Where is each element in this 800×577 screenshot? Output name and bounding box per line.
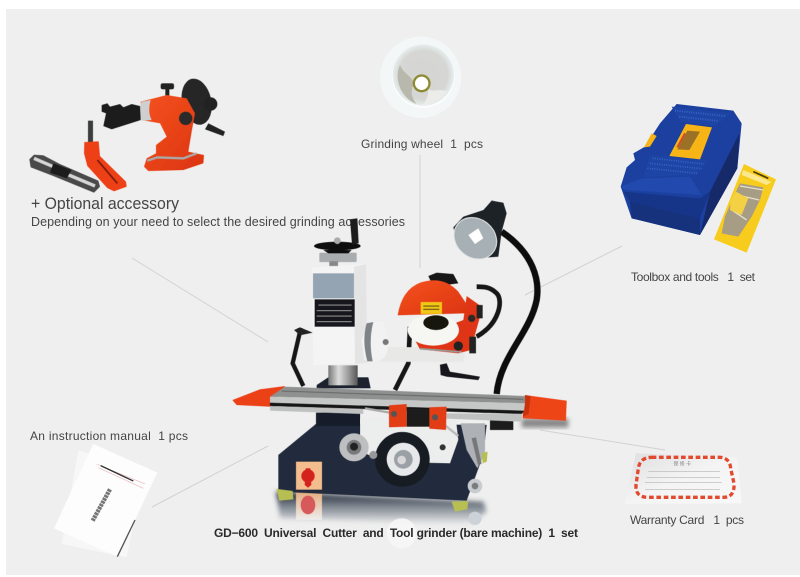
label: instruction manual: An instruction manual 1 pcs: [30, 429, 188, 443]
title: machine caption: GD−600 Universal Cutter and Tool grinder (bare machine) 1 set: [214, 526, 578, 540]
adjustment lever: [440, 363, 480, 380]
white saddle carriage: [360, 418, 458, 463]
black clamp block: [102, 103, 141, 129]
red wheel guard: [398, 280, 468, 315]
icon: grinding wheel: [380, 37, 461, 118]
grinding head arm: [362, 322, 465, 362]
label: warranty card: Warranty Card 1 pcs: [630, 513, 744, 527]
grinding wheel: [408, 314, 459, 346]
red tilting head with pedestal: [139, 95, 204, 171]
icon: warranty card: 保 修 卡: [673, 460, 691, 467]
lamp shade with bulb: [446, 201, 507, 268]
heading: optional accessory: + Optional accessory: [31, 195, 180, 213]
leader lines: [132, 155, 665, 507]
label: toolbox and tools: Toolbox and tools 1 set: [631, 270, 756, 284]
yellow latch: [644, 133, 657, 147]
disc and dark handwheel: [161, 76, 225, 136]
icon: instruction manual: [54, 444, 157, 557]
column pedestal: [317, 365, 371, 388]
yellow handle: [669, 124, 712, 159]
handle knob: [294, 327, 313, 335]
icon: toolbox and hex keys: [621, 104, 776, 253]
motor and red carrier: [414, 273, 483, 353]
main machine: GD-600 universal cutter and tool grinder: [232, 201, 568, 548]
angled bracket: [84, 121, 127, 191]
work table: [270, 387, 525, 422]
red table trays: [232, 386, 567, 421]
label: grinding wheel: Grinding wheel 1 pcs: [361, 137, 483, 151]
red feed blocks and levers: [365, 404, 458, 436]
table shadow and base reflection: [276, 418, 568, 548]
hex key card: [714, 164, 776, 253]
black cables: [293, 287, 500, 390]
blue toolbox: [621, 104, 742, 235]
feed handwheel: [375, 432, 430, 487]
icon: optional grinding accessories: [29, 76, 225, 193]
text: optional accessory description: Depending on your need to select the desired grinding accessories: [31, 215, 405, 229]
arbor: [29, 155, 100, 193]
top handwheel: [314, 218, 361, 266]
power switch: [296, 462, 322, 490]
levelling feet: [277, 452, 488, 512]
lamp gooseneck: [497, 232, 537, 394]
base casting: [278, 413, 513, 501]
icon: warranty card: [625, 453, 742, 504]
cross-feed cylinder: [339, 433, 446, 461]
column housing: [312, 264, 367, 365]
side handle and knob: [461, 423, 485, 493]
